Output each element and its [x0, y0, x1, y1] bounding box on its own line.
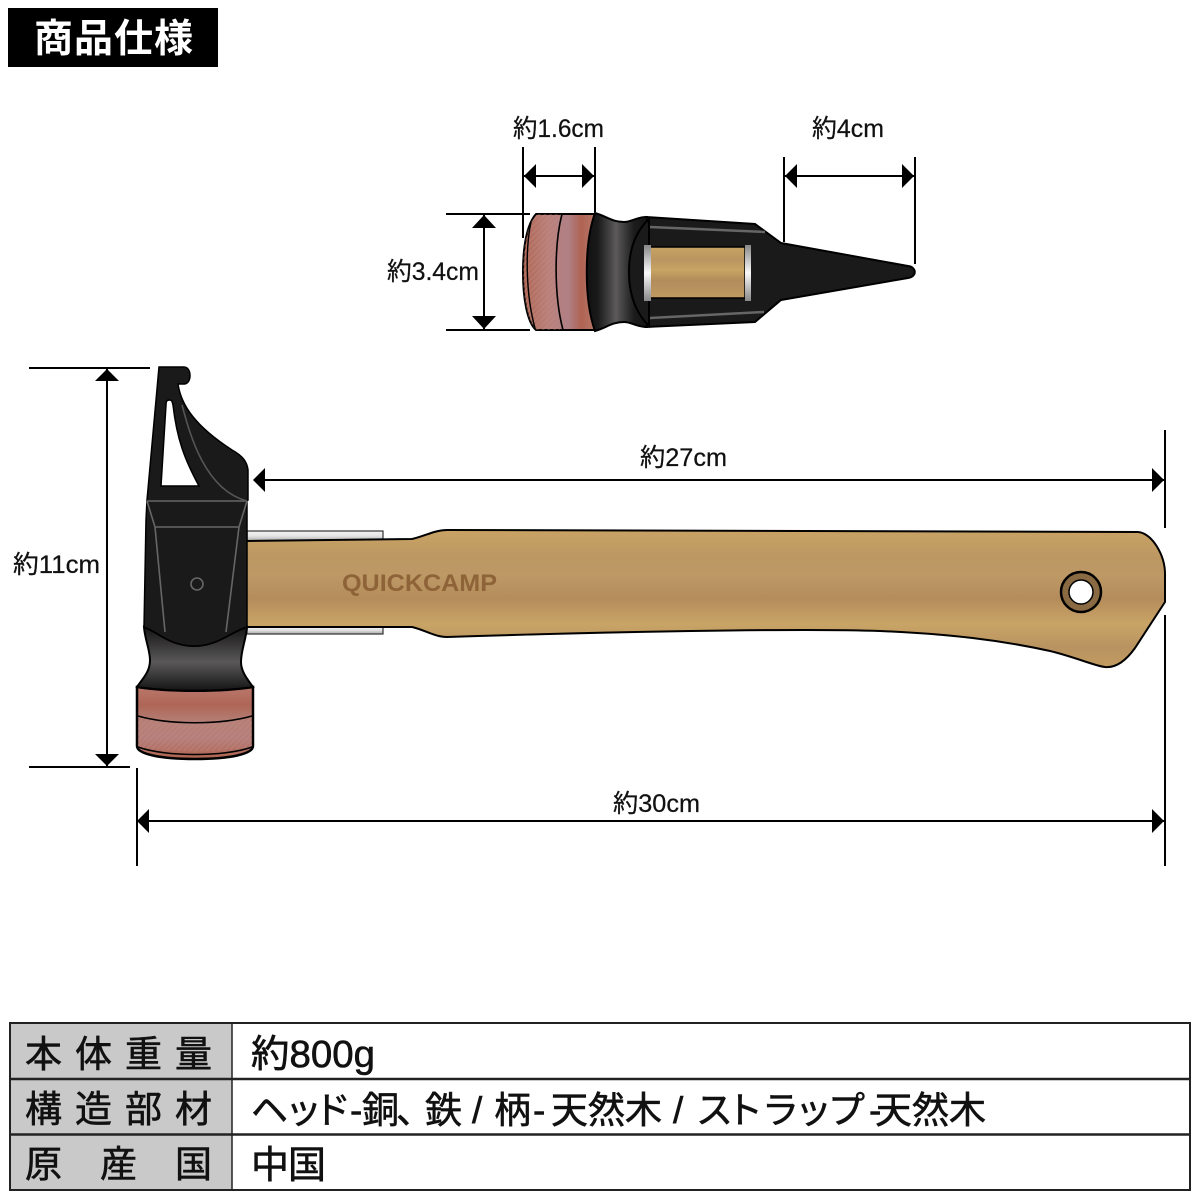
row: weight [25, 1034, 375, 1076]
dimension: 11cm: 約11cm [13, 551, 100, 579]
top view hammer head [523, 213, 915, 331]
dimension: 3.4cm: 約3.4cm [387, 258, 479, 286]
lanyard eyelet [1061, 572, 1101, 612]
head body with claw [144, 367, 248, 646]
row: weight: 約800g [251, 1034, 375, 1076]
copper head [137, 687, 253, 759]
side view hammer [137, 367, 1165, 759]
spec table [10, 1023, 1190, 1190]
steel straps [247, 531, 383, 634]
title [8, 8, 218, 67]
dimension: 3.4cm [387, 214, 530, 330]
dimension: 27cm: 約27cm [640, 444, 727, 472]
title: 商品仕様 [34, 18, 193, 61]
row: origin: 中国 [251, 1145, 326, 1187]
row: materials: ヘッド-銅、鉄 / 柄-天然木 / ストラップ-天然木 [251, 1090, 986, 1131]
row: weight: 本体重量 [25, 1034, 212, 1075]
dimension: 11cm [13, 368, 150, 767]
row: materials: 構造部材 [25, 1089, 212, 1130]
dimension: 4cm: 約4cm [812, 115, 884, 143]
steel neck [137, 627, 253, 691]
row: origin: 原産国 [25, 1144, 212, 1185]
head bevel lines [147, 405, 247, 632]
copper face (top view) [523, 214, 596, 330]
dimension: 1.6cm [513, 115, 604, 238]
dimension: 30cm: 約30cm [613, 790, 700, 818]
dimension: 4cm [784, 115, 915, 264]
dimension: 27cm [253, 430, 1165, 866]
dimension: 1.6cm: 約1.6cm [513, 115, 604, 143]
brand mark: QUICKCAMP [342, 570, 497, 597]
row: origin [25, 1144, 326, 1187]
wooden handle section (top view) [644, 245, 751, 301]
black body (top view) [646, 217, 915, 327]
black neck (top view) [587, 213, 647, 331]
wooden handle [246, 530, 1165, 667]
dimension: 30cm [137, 768, 1165, 866]
